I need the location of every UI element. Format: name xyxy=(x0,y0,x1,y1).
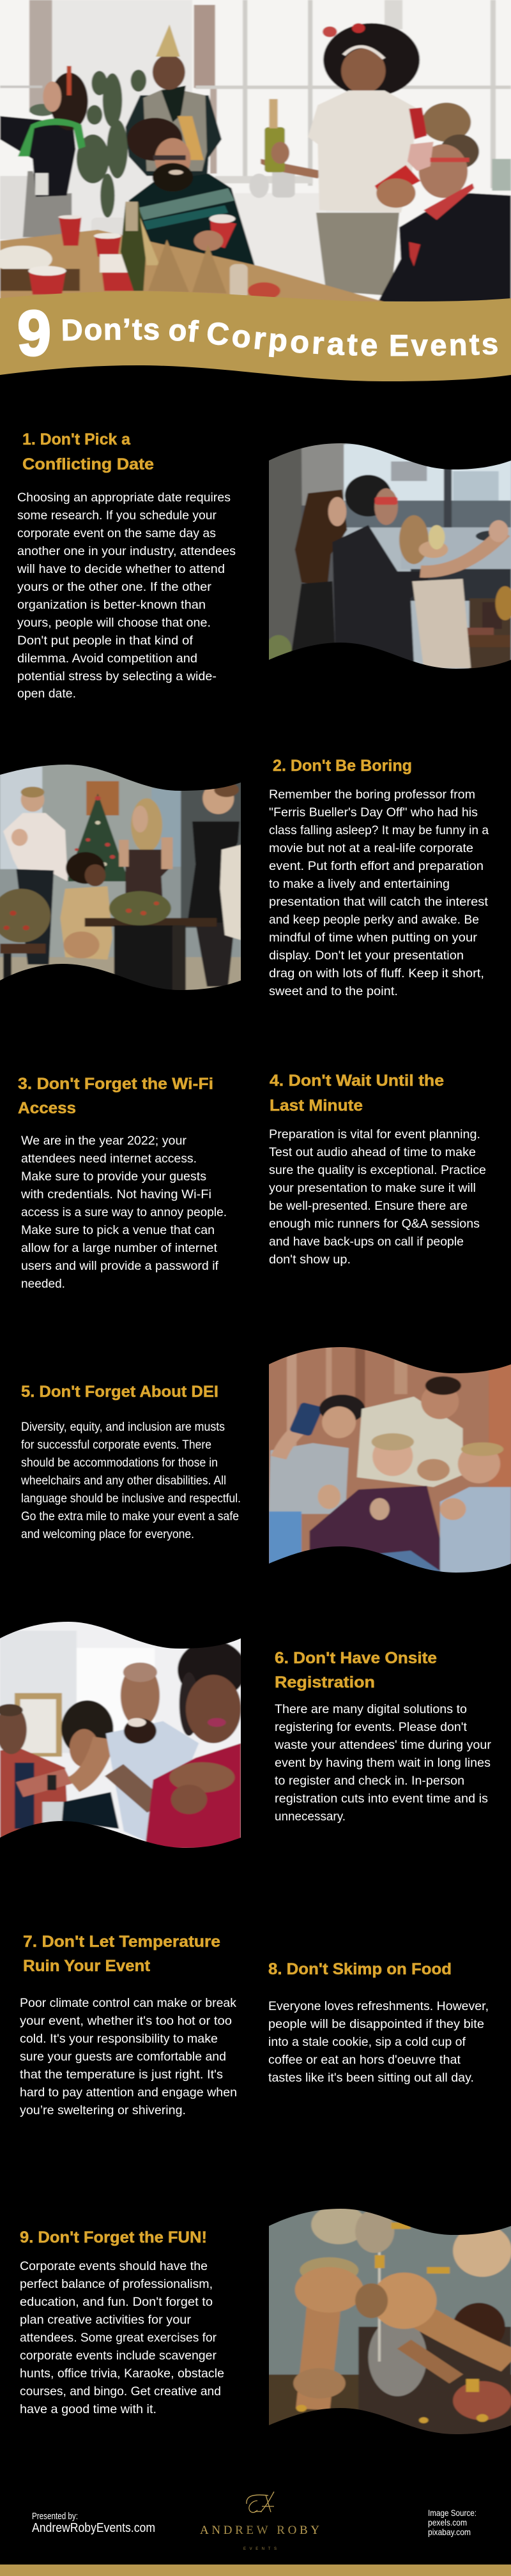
image source: pixabay.com xyxy=(428,2527,471,2537)
heading 4: 4. Don't Wait Until the xyxy=(270,1072,444,1090)
photo 6: people in a conga line xyxy=(0,1619,246,1851)
title banner: Don’ts xyxy=(63,318,159,341)
photo 1: people taking a selfie xyxy=(266,439,511,672)
body text 5: Go the extra mile to make your event a safe xyxy=(21,1509,239,1523)
body text 9: hunts, office trivia, Karaoke, obstacle xyxy=(20,2366,224,2381)
body text 2: Remember the boring professor from xyxy=(269,788,475,802)
body text 7 xyxy=(20,1996,237,2117)
heading 4 xyxy=(270,1072,444,1115)
body text 6: registering for events. Please don't xyxy=(275,1720,468,1734)
body text 9: courses, and bingo. Get creative and xyxy=(20,2384,221,2398)
body text 5: language should be inclusive and respectful. xyxy=(21,1491,241,1505)
body text 3: with credentials. Not having Wi-Fi xyxy=(20,1187,211,1201)
body text 2: drag on with lots of fluff. Keep it short, xyxy=(269,966,484,980)
body text 1: corporate event on the same day as xyxy=(17,526,216,540)
body text 6: event by having them wait in long lines xyxy=(275,1756,491,1770)
panel: 8 food xyxy=(268,1960,489,2085)
body text 4: don't show up. xyxy=(269,1253,351,1267)
man standing xyxy=(125,95,222,176)
body text 1 xyxy=(17,491,236,701)
heading 8: 8. Don't Skimp on Food xyxy=(268,1960,452,1978)
seated man xyxy=(129,174,256,269)
image source: pexels.com xyxy=(428,2517,467,2527)
panel: 3 wifi access xyxy=(18,1075,227,1291)
body text 8: into a stale cookie, sip a cold cup of xyxy=(268,2035,466,2049)
man right xyxy=(378,193,511,303)
hero photo: office party xyxy=(0,0,511,310)
body text 8: tastes like it's been sitting out all day. xyxy=(268,2071,474,2085)
body text 2: "Ferris Bueller's Day Off" who had his xyxy=(269,805,478,819)
heading 1: 1. Don't Pick a xyxy=(22,431,131,448)
body text 2: class falling asleep? It may be funny in a xyxy=(269,823,489,837)
body text 1: yours, people will choose that one. xyxy=(17,616,211,630)
body text 6: to register and check in. In-person xyxy=(275,1774,464,1788)
body text 2 xyxy=(269,788,489,998)
body text 5 xyxy=(20,1420,241,1541)
title banner: Corporate xyxy=(207,322,377,358)
body text 8: people will be disappointed if they bite xyxy=(268,2017,484,2031)
presented by: Presented by: xyxy=(32,2511,78,2522)
body text 2: mindful of time when putting on your xyxy=(269,931,478,945)
body text 9: perfect balance of professionalism, xyxy=(20,2277,213,2291)
title banner: Events xyxy=(391,335,498,356)
heading 7 xyxy=(23,1933,220,1975)
body text 4: sure the quality is exceptional. Practice xyxy=(269,1163,486,1177)
body text 1: organization is better-known than xyxy=(17,598,206,612)
heading 6 xyxy=(275,1649,437,1691)
body text 1: yours or the other one. If the other xyxy=(17,580,212,594)
table xyxy=(0,230,385,308)
logo: Andrew Roby Events: ANDREW ROBY xyxy=(200,2524,319,2537)
body text 6 xyxy=(274,1702,492,1824)
body text 3: Make sure to pick a venue that can xyxy=(21,1223,215,1237)
body text 7: you’re sweltering or shivering. xyxy=(20,2103,186,2117)
heading 6: 6. Don't Have Onsite xyxy=(275,1649,437,1667)
photo 2: christmas party xyxy=(0,761,245,996)
body text 5: and welcoming place for everyone. xyxy=(21,1527,194,1541)
body text 1: will have to decide whether to attend xyxy=(17,562,225,576)
body text 1: potential stress by selecting a wide- xyxy=(17,669,217,683)
body text 3: Make sure to provide your guests xyxy=(21,1170,206,1184)
body text 4: Preparation is vital for event planning. xyxy=(269,1127,480,1141)
heading 5: 5. Don't Forget About DEI xyxy=(21,1383,218,1401)
body text 9 xyxy=(20,2259,224,2416)
heading 6: Registration xyxy=(275,1673,375,1691)
body text 2: and keep people perky and awake. Be xyxy=(269,913,479,927)
woman left xyxy=(23,171,72,237)
body text 9: Corporate events should have the xyxy=(20,2259,208,2273)
body text 3 xyxy=(20,1134,227,1291)
icon: monogram xyxy=(247,2492,274,2512)
body text 8: Everyone loves refreshments. However, xyxy=(268,1999,489,2013)
body text 5: Diversity, equity, and inclusion are musts xyxy=(21,1420,225,1434)
body text 6: There are many digital solutions to xyxy=(275,1702,467,1716)
heading 1: Conflicting Date xyxy=(22,455,154,473)
body text 1: dilemma. Avoid competition and xyxy=(17,652,197,666)
body text 8 xyxy=(268,1999,489,2085)
body text 3: attendees need internet access. xyxy=(21,1152,197,1166)
body text 9: corporate events include scavenger xyxy=(20,2349,217,2363)
footer xyxy=(0,2492,511,2576)
body text 9: plan creative activities for your xyxy=(20,2313,192,2327)
body text 9: attendees. Some great exercises for xyxy=(20,2331,217,2345)
body text 3: allow for a large number of internet xyxy=(21,1241,218,1255)
body text 2: sweet and to the point. xyxy=(269,984,398,998)
body text 2: to make a lively and entertaining xyxy=(269,877,450,891)
heading 3 xyxy=(18,1075,213,1117)
body text 6: unnecessary. xyxy=(275,1810,346,1824)
panel: 7 temperature xyxy=(20,1933,237,2117)
body text 6: registration cuts into event time and is xyxy=(275,1792,488,1806)
heading 3: Access xyxy=(18,1099,76,1117)
body text 2: display. Don't let your presentation xyxy=(269,949,464,963)
heading 9: 9. Don't Forget the FUN! xyxy=(20,2229,207,2246)
title banner xyxy=(0,291,511,381)
body text 7: hard to pay attention and engage when xyxy=(20,2085,237,2100)
title banner: of xyxy=(169,319,199,342)
title banner: 9 xyxy=(17,298,51,369)
body text 5: wheelchairs and any other disabilities. All xyxy=(20,1474,226,1488)
body text 2: event. Put forth effort and preparation xyxy=(269,859,484,873)
body text 4: your presentation to make sure it will xyxy=(269,1181,476,1195)
body text 9: education, and fun. Don't forget to xyxy=(20,2295,213,2309)
body text 1: open date. xyxy=(17,687,76,701)
heading 4: Last Minute xyxy=(270,1097,363,1115)
bottom gold strip xyxy=(0,2565,511,2576)
body text 1: some research. If you schedule your xyxy=(17,508,217,522)
body text 5: for successful corporate events. There xyxy=(21,1438,211,1452)
panel: 4 last minute xyxy=(269,1072,486,1267)
presented by: AndrewRobyEvents.com xyxy=(32,2521,155,2535)
body text 7: cold. It's your responsibility to make xyxy=(20,2032,218,2046)
panel: 6 onsite registration xyxy=(0,1619,492,1851)
heading 3: 3. Don't Forget the Wi-Fi xyxy=(18,1075,213,1093)
logo: Andrew Roby Events: EVENTS xyxy=(243,2547,277,2551)
body text 8: coffee or eat an hors d'oeuvre that xyxy=(268,2053,461,2067)
panel: 9 fun xyxy=(20,2205,511,2437)
body text 3: needed. xyxy=(21,1277,65,1291)
heading 7: 7. Don't Let Temperature xyxy=(23,1933,220,1951)
body text 1: Choosing an appropriate date requires xyxy=(17,491,231,505)
body text 4: be well-presented. Ensure there are xyxy=(269,1199,468,1213)
body text 3: access is a sure way to annoy people. xyxy=(21,1205,227,1219)
photo 5: group selfie xyxy=(266,1343,511,1578)
body text 4: and have back-ups on call if people xyxy=(269,1235,464,1249)
logo: Andrew Roby Events xyxy=(200,2492,319,2551)
body text 7: that the temperature is just right. It's xyxy=(20,2068,223,2082)
body text 7: Poor climate control can make or break xyxy=(20,1996,236,2010)
body text 2: presentation that will catch the interest xyxy=(269,895,489,909)
panel: 1 conflicting date xyxy=(17,431,511,701)
image source: Image Source: xyxy=(428,2508,477,2518)
heading 1 xyxy=(22,431,154,473)
body text 4: Test out audio ahead of time to make xyxy=(269,1145,476,1159)
plant xyxy=(77,70,146,218)
woman right xyxy=(323,23,420,96)
body text 9: have a good time with it. xyxy=(20,2402,156,2416)
panel: 5 DEI xyxy=(20,1343,511,1578)
photo 9: champagne toast xyxy=(266,2205,511,2437)
presented by xyxy=(32,2511,155,2535)
heading 2: 2. Don't Be Boring xyxy=(273,757,412,775)
body text 7: your event, whether it's too hot or too xyxy=(20,2014,232,2028)
body text 4 xyxy=(269,1127,486,1267)
body text 5: should be accommodations for those in xyxy=(21,1456,218,1470)
body text 4: enough mic runners for Q&A sessions xyxy=(269,1217,480,1231)
body text 7: sure your guests are comfortable and xyxy=(20,2050,226,2064)
body text 2: movie but not at a real-life corporate xyxy=(269,841,473,855)
body text 3: We are in the year 2022; your xyxy=(21,1134,187,1148)
panel: 2 being boring xyxy=(0,757,489,998)
body text 1: Don't put people in that kind of xyxy=(17,634,194,648)
image source xyxy=(428,2508,477,2537)
body text 3: users and will provide a password if xyxy=(21,1259,219,1273)
body text 1: another one in your industry, attendees xyxy=(17,544,236,558)
body text 6: waste your attendees' time during your xyxy=(274,1738,492,1752)
heading 7: Ruin Your Event xyxy=(23,1957,151,1975)
